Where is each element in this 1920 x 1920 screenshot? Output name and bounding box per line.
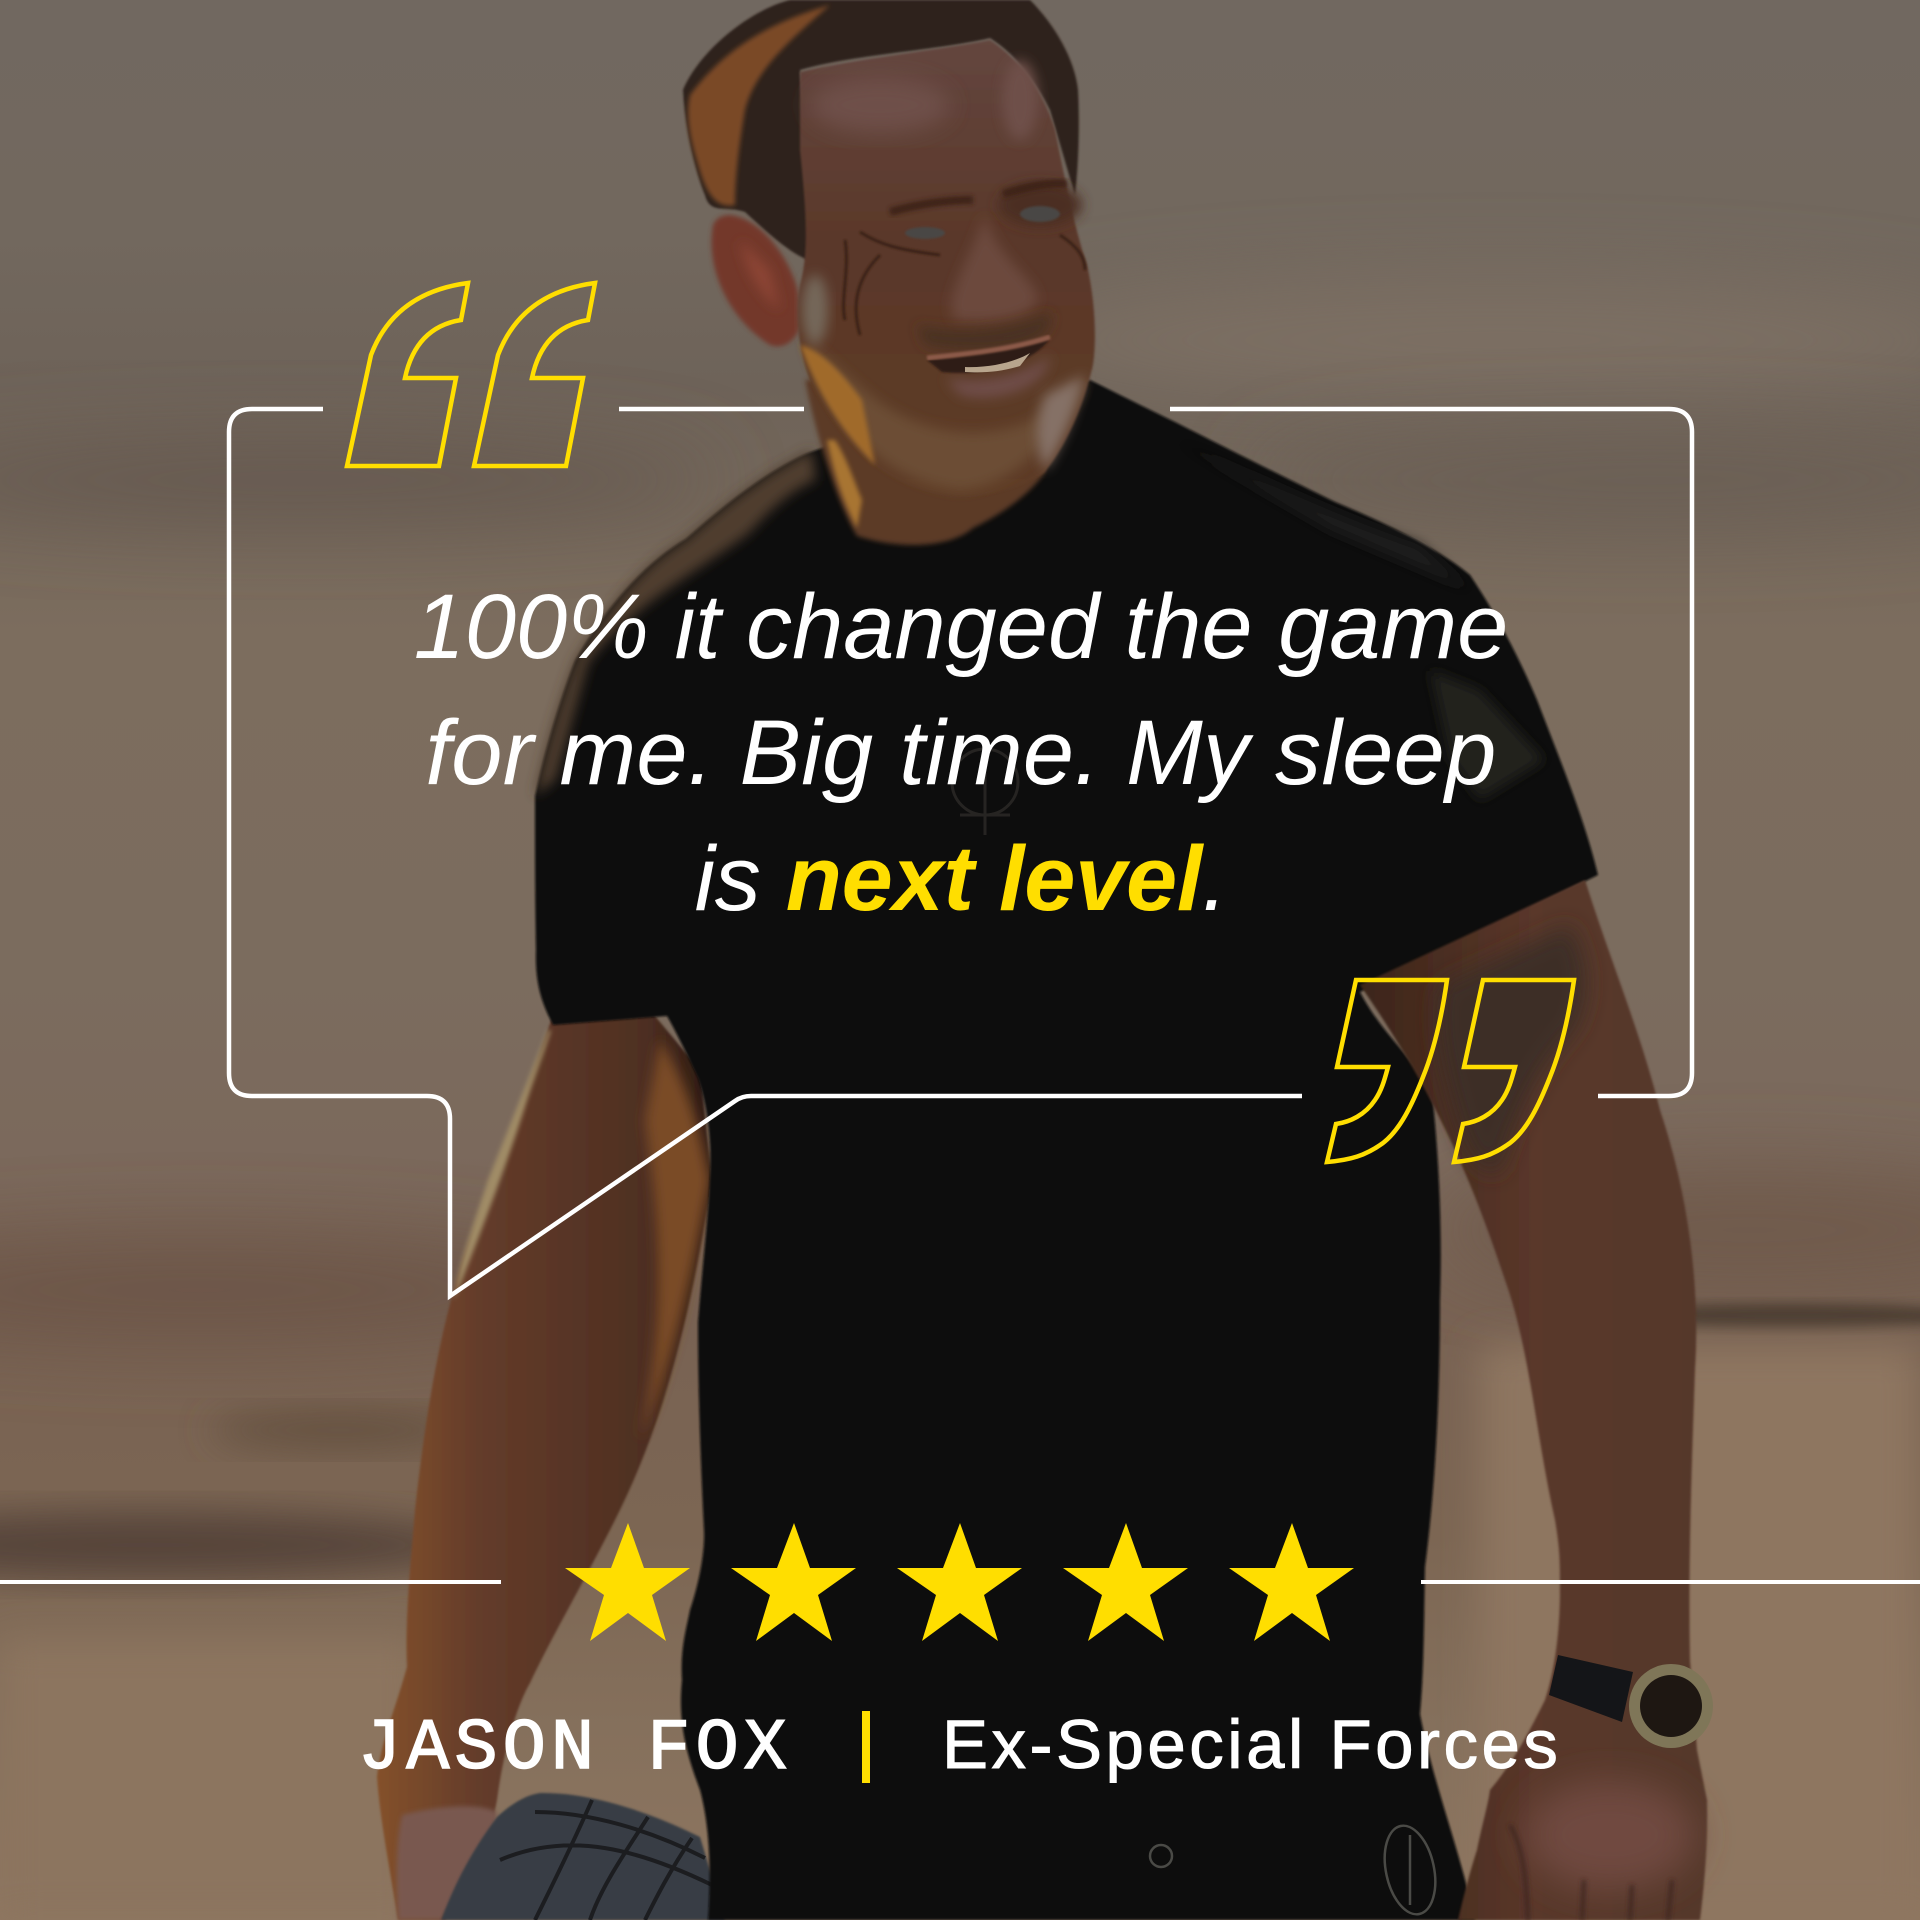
- photo: shirt shoulder seam: [1175, 440, 1470, 590]
- photo: moustache shadow: [917, 312, 1051, 350]
- photo: sleeve patch: [1430, 670, 1545, 800]
- speech bubble outline: [229, 409, 1692, 1296]
- photo: ear inner shadow: [740, 240, 780, 310]
- photo: forearm highlight: [454, 1030, 551, 1300]
- photo: left hand: [397, 1806, 497, 1920]
- icon: closing quotation marks: [1327, 980, 1574, 1162]
- photo: neck: [805, 380, 1045, 545]
- photo: shoulder light on shirt: [535, 450, 816, 796]
- photo: sideburn stubble: [802, 275, 828, 345]
- testimonial quote text: 100% it changed the game: [414, 576, 1508, 678]
- photo: grey stubble: [1038, 375, 1085, 470]
- photo: stubble beard: [805, 340, 1085, 490]
- photo: nose: [951, 215, 1037, 321]
- photo: neck highlight: [827, 440, 862, 528]
- photo: tyre: [441, 1793, 725, 1920]
- photo: ear: [712, 215, 802, 346]
- icon: opening quotation marks: [347, 283, 595, 466]
- photo: black t-shirt and trousers: [535, 380, 1598, 1920]
- photo: finger gaps: [1510, 1825, 1672, 1920]
- photo: hand highlight: [1525, 1780, 1695, 1890]
- photo: eye wrinkles: [844, 232, 1085, 335]
- photo: sunlit jaw: [800, 345, 875, 465]
- rating divider line right: [1421, 1580, 1920, 1584]
- photo: wristwatch: [1549, 1655, 1713, 1748]
- photo: shirt chest logo: [952, 740, 1018, 835]
- attribution name: JASON FOX: [358, 1708, 792, 1790]
- attribution role: Ex-Special Forces: [942, 1706, 1561, 1783]
- attribution separator: [862, 1711, 870, 1783]
- rating divider line left: [0, 1580, 501, 1584]
- photo: brows: [890, 183, 1067, 212]
- testimonial quote text: for me. Big time. My sleep: [425, 702, 1497, 804]
- five star rating: [565, 1523, 1354, 1641]
- testimonial quote text: [414, 576, 1508, 930]
- photo: left arm: [377, 1010, 712, 1920]
- photo: trouser details: [1150, 1821, 1443, 1919]
- photo: forearm tattoo: [1437, 925, 1586, 1173]
- photo: sunlit hair: [688, 5, 830, 206]
- photo: muscle shading on forearm: [640, 1040, 710, 1440]
- photo: eyes: [905, 206, 1060, 239]
- photo: right arm: [1360, 880, 1707, 1920]
- photo: mouth: [927, 337, 1050, 373]
- photo: face: [798, 40, 1095, 496]
- photo: right forehead highlight: [1002, 60, 1038, 140]
- photo: lower lip: [945, 355, 1050, 398]
- photo: hair: [683, 0, 1079, 262]
- testimonial quote text: is next level.: [695, 828, 1227, 930]
- photo: forehead highlight: [810, 77, 950, 133]
- photo: eye socket shadows: [998, 183, 1082, 227]
